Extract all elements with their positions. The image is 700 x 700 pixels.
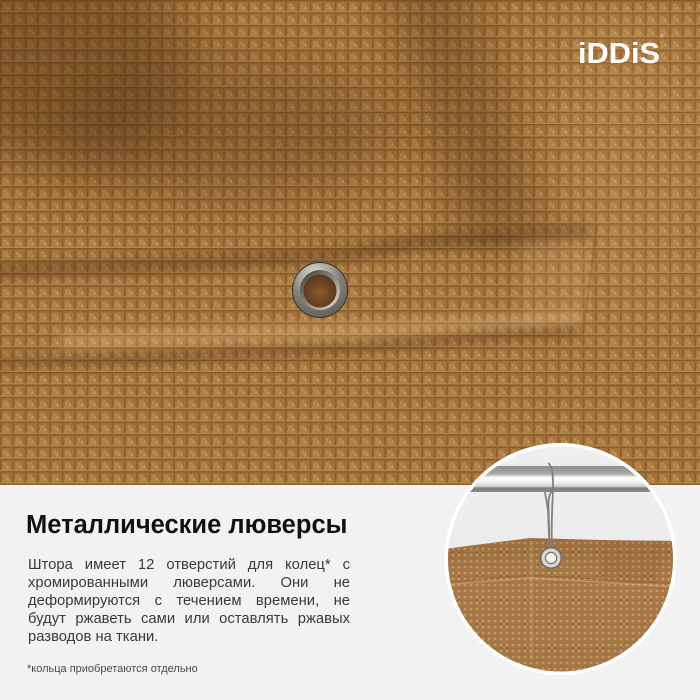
fabric texture: [0, 0, 700, 485]
panel: text background: [0, 485, 700, 700]
photo: brown waffle fabric with metal grommet: [0, 0, 700, 485]
logo: IDDIS: iDDiS: [578, 38, 660, 70]
curtain fabric: [448, 538, 673, 672]
heading: Металлические люверсы: [26, 511, 347, 539]
shower hook: [545, 463, 555, 548]
white ring: [444, 443, 676, 675]
metal grommet: [292, 262, 348, 318]
text block: description: разводов на ткани.: [28, 629, 158, 645]
inset circle: rod, hook and curtain: [444, 443, 676, 675]
text block: description: деформируются с течением времени, не: [28, 593, 350, 609]
text block: description: хромированными люверсами. Они не: [28, 575, 350, 591]
footnote: *кольца приобретаются отдельно: [27, 663, 198, 675]
text block: description: Штора имеет 12 отверстий для колец* с: [28, 557, 350, 573]
logo: IDDIS: ®: [660, 33, 664, 40]
text block: description: будут ржаветь сами или оставлять ржавых: [28, 611, 350, 627]
wall background: [448, 446, 672, 548]
small grommet: [540, 547, 562, 569]
curtain rod: [470, 466, 651, 492]
text block: description: [28, 557, 350, 645]
fabric shading: folds and shadows: [0, 0, 700, 485]
